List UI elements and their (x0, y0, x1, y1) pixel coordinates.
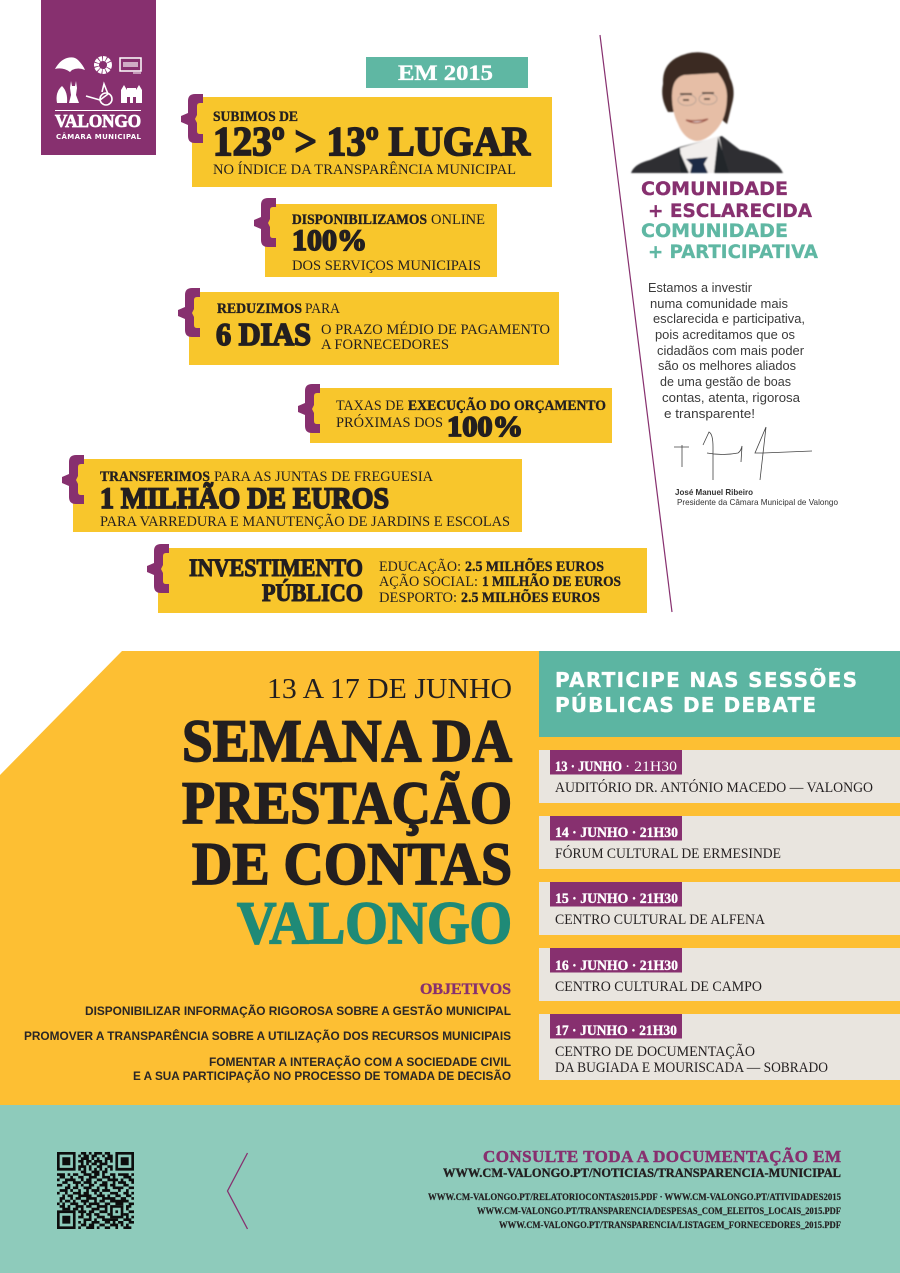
text: transfers caption: PARA VARREDURA E MANUTENÇÃO DE JARDINS E ESCOLAS (100, 514, 510, 530)
text: desporto: DESPORTO: (379, 590, 457, 606)
text: document links: WWW.CM-VALONGO.PT/RELATORIOCONTAS2015.PDF · WWW.CM-VALONGO.PT/ATIVIDADES2015 (428, 1193, 841, 1203)
session row 13 june: · 21H30 (625, 759, 677, 775)
text: investimento: INVESTIMENTO (189, 555, 363, 582)
QR code (57, 1153, 134, 1228)
text: 6 dias: 6 DIAS (216, 316, 311, 352)
title: semana da prestacao de contas (182, 708, 512, 897)
text: 100%: 100% (447, 411, 523, 443)
logo wordmark: VALONGO (55, 111, 141, 131)
panel: sessions heading: PARTICIPE NAS SESSÕES (555, 668, 857, 692)
session row 15 june (539, 882, 900, 935)
panel: online services (254, 198, 497, 277)
portrait of the president (631, 52, 783, 173)
text block: president message: são os melhores aliados (658, 359, 796, 373)
text: president role: Presidente da Câmara Municipal de Valongo (677, 497, 838, 507)
bracket (254, 198, 276, 247)
text: disponibilizamos: DISPONIBILIZAMOS (292, 212, 427, 228)
panel: sessions heading (539, 651, 900, 737)
icon: tent (55, 57, 85, 72)
bracket (147, 544, 169, 593)
text block: president message: contas, atenta, rigorosa (662, 391, 800, 405)
text block: president message: pois acreditamos que os (655, 328, 795, 342)
text block: president message: de uma gestão de boas (660, 375, 791, 389)
text block: president message: cidadãos com mais poder (657, 344, 804, 358)
text: educacao: 2.5 MILHÕES EUROS (465, 557, 604, 575)
session row 13 june (539, 750, 900, 803)
text: para: PARA (305, 301, 340, 317)
text: document links (428, 1193, 841, 1231)
panel: yellow event background (0, 651, 900, 1105)
text block: president message: e transparente! (664, 407, 755, 421)
text: payment caption 1: O PRAZO MÉDIO DE PAGAMENTO (321, 321, 550, 338)
bracket (181, 94, 203, 143)
icon: screen (120, 58, 141, 73)
text: 100%: 100% (292, 224, 367, 257)
text: subimos de: SUBIMOS DE (213, 109, 298, 125)
divider line (600, 35, 672, 612)
text: educacao (379, 557, 604, 575)
title: valongo: VALONGO (237, 890, 512, 956)
objective list (24, 1003, 511, 1083)
session row 16 june (539, 948, 900, 1001)
logo panel (41, 0, 156, 155)
text: event dates: 13 A 17 DE JUNHO (267, 673, 512, 705)
icon: figures (57, 81, 79, 103)
bracket (62, 455, 84, 504)
arrow chevron (228, 1153, 248, 1229)
objective list: PROMOVER A TRANSPARÊNCIA SOBRE A UTILIZAÇÃO DOS RECURSOS MUNICIPAIS (24, 1028, 511, 1043)
logo subtitle: CÂMARA MUNICIPAL (56, 132, 142, 141)
heading: comunidade esclarecida: COMUNIDADE (641, 178, 788, 200)
session row 14 june: FÓRUM CULTURAL DE ERMESINDE (555, 845, 781, 862)
text block: objetivos (24, 981, 511, 1083)
signature (674, 427, 812, 480)
text: main link: WWW.CM-VALONGO.PT/NOTICIAS/TRANSPARENCIA-MUNICIPAL (443, 1165, 841, 1180)
heading: objetivos: OBJETIVOS (420, 981, 511, 998)
title: semana da prestacao de contas: DE CONTAS (192, 831, 512, 897)
text: publico: PÚBLICO (262, 579, 363, 607)
panel: transfers (62, 455, 522, 532)
bracket (298, 384, 320, 433)
text: ranking caption: NO ÍNDICE DA TRANSPARÊNCIA MUNICIPAL (213, 161, 516, 178)
text: document links: WWW.CM-VALONGO.PT/TRANSPARENCIA/LISTAGEM_FORNECEDORES_2015.PDF (499, 1221, 841, 1231)
text: acao social: AÇÃO SOCIAL: (379, 574, 478, 590)
session row 13 june: AUDITÓRIO DR. ANTÓNIO MACEDO — VALONGO (555, 779, 873, 796)
title: semana da prestacao de contas: PRESTAÇÃO (182, 770, 512, 836)
text: payment caption 2: A FORNECEDORES (321, 337, 449, 353)
session row 13 june: 13 · JUNHO (555, 759, 622, 775)
text: 1 milhao: 1 MILHÃO DE EUROS (100, 482, 389, 515)
session row 17 june: 17 · JUNHO · 21H30 (555, 1023, 677, 1039)
session row 16 june: CENTRO CULTURAL DE CAMPO (555, 979, 762, 995)
panel: sessions heading: PÚBLICAS DE DEBATE (555, 693, 816, 717)
text: ranking value: 123º > 13º LUGAR (213, 118, 530, 164)
session row 17 june: DA BUGIADA E MOURISCADA — SOBRADO (555, 1060, 828, 1076)
panel: public investment (147, 544, 647, 613)
badge: em 2015: EM 2015 (398, 60, 493, 85)
text: services caption: DOS SERVIÇOS MUNICIPAIS (292, 258, 481, 274)
text: online: ONLINE (431, 212, 485, 228)
text: consulte heading: CONSULTE TODA A DOCUMENTAÇÃO EM (483, 1147, 841, 1166)
text: taxas de: TAXAS DE (336, 398, 404, 414)
text: desporto (379, 588, 600, 606)
text: desporto: 2.5 MILHÕES EUROS (461, 588, 600, 606)
session row 14 june (539, 816, 900, 869)
text: reduzimos: REDUZIMOS (217, 301, 302, 317)
heading: comunidade esclarecida (641, 178, 812, 222)
panel: footer (0, 1105, 900, 1273)
text block: president message: numa comunidade mais (650, 297, 788, 311)
heading: comunidade participativa: + PARTICIPATIVA (648, 241, 818, 263)
objective list: E A SUA PARTICIPAÇÃO NO PROCESSO DE TOMADA DE DECISÃO (133, 1068, 511, 1083)
session row 15 june: 15 · JUNHO · 21H30 (555, 891, 678, 907)
text block: president message (648, 281, 805, 421)
session row 17 june (539, 1014, 900, 1080)
panel: budget execution (298, 384, 612, 443)
heading: comunidade participativa (641, 220, 818, 263)
text: proximas dos: PRÓXIMAS DOS (336, 414, 443, 431)
panel: ranking (181, 94, 552, 187)
objective list: DISPONIBILIZAR INFORMAÇÃO RIGOROSA SOBRE A GESTÃO MUNICIPAL (85, 1003, 511, 1018)
text: document links: WWW.CM-VALONGO.PT/TRANSPARENCIA/DESPESAS_COM_ELEITOS_LOCAIS_2015.PDF (477, 1207, 841, 1217)
text: transferimos: TRANSFERIMOS (100, 469, 210, 485)
icon: bicycle rider (86, 84, 112, 105)
session row 15 june: CENTRO CULTURAL DE ALFENA (555, 912, 765, 928)
badge: em 2015 (366, 57, 528, 88)
heading: comunidade participativa: COMUNIDADE (641, 220, 788, 242)
icon: ring (96, 58, 110, 72)
session row 16 june: 16 · JUNHO · 21H30 (555, 958, 678, 974)
text: juntas: PARA AS JUNTAS DE FREGUESIA (214, 469, 434, 485)
bracket (178, 288, 200, 337)
heading: comunidade esclarecida: + ESCLARECIDA (648, 200, 812, 222)
title: semana da prestacao de contas: SEMANA DA (182, 708, 512, 774)
text: acao social (379, 572, 621, 590)
text: educacao: EDUCAÇÃO: (379, 559, 461, 575)
session row 14 june: 14 · JUNHO · 21H30 (555, 825, 678, 841)
session row 17 june: CENTRO DE DOCUMENTAÇÃO (555, 1044, 755, 1060)
text block: president message: Estamos a investir (648, 281, 752, 295)
panel: payment days (178, 288, 559, 365)
text: president name: José Manuel Ribeiro (675, 487, 753, 497)
objective list: FOMENTAR A INTERAÇÃO COM A SOCIEDADE CIVIL (209, 1054, 511, 1069)
text: acao social: 1 MILHÃO DE EUROS (482, 572, 621, 590)
text block: president message: esclarecida e participativa, (653, 312, 805, 326)
text: execucao: EXECUÇÃO DO ORÇAMENTO (408, 396, 606, 414)
icon: church (121, 85, 142, 103)
